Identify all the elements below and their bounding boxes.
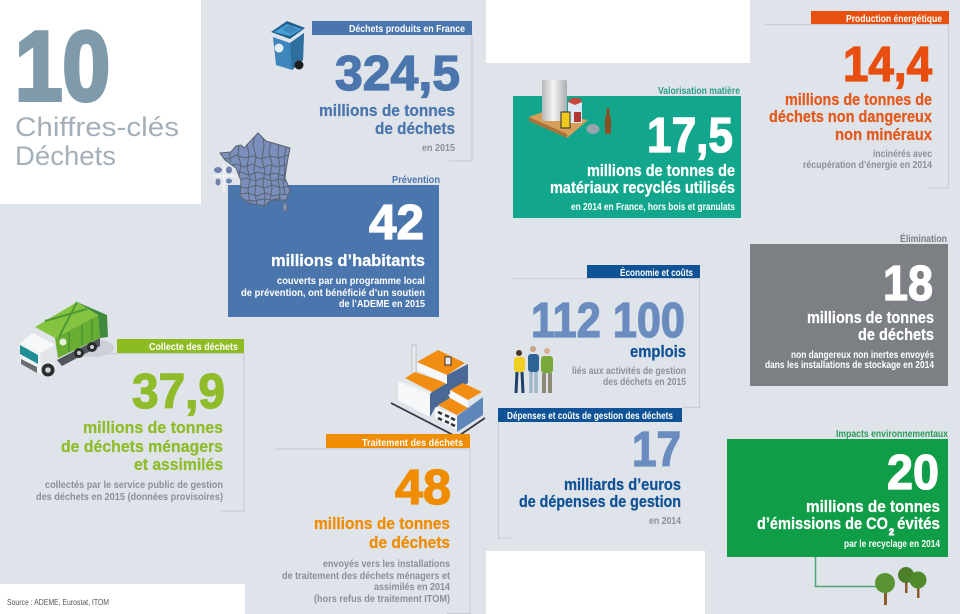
note: des déchets en 2015 xyxy=(603,377,686,388)
header bar xyxy=(498,408,682,422)
title: Chiffres-clés xyxy=(15,112,179,142)
description xyxy=(550,162,735,197)
note: en 2014 en France, hors bois et granulats xyxy=(571,202,735,213)
description: millions de tonnes xyxy=(319,102,455,120)
header bar: Collecte des déchets xyxy=(149,341,238,353)
note: couverts par un programme local xyxy=(277,276,425,287)
description: emplois xyxy=(630,343,686,361)
panel: production énergétique xyxy=(765,11,949,188)
description xyxy=(769,91,933,144)
note xyxy=(241,276,425,310)
header bar: Déchets produits en France xyxy=(349,23,465,35)
note: non dangereux non inertes envoyés xyxy=(791,350,934,361)
note: incinérés avec xyxy=(873,149,932,160)
key figure: 48 xyxy=(395,461,451,515)
icon: recycling bin xyxy=(271,21,305,70)
title: 10 xyxy=(15,11,110,121)
key figure: 324,5 xyxy=(335,47,460,101)
description: de déchets xyxy=(858,326,934,344)
description: millions d’habitants xyxy=(271,252,425,270)
header bar xyxy=(312,21,472,35)
description xyxy=(807,309,934,344)
header bar xyxy=(326,434,470,449)
title xyxy=(0,0,201,204)
note: des déchets en 2015 (données provisoires) xyxy=(36,492,223,503)
note: de l’ADEME en 2015 xyxy=(339,299,425,310)
note: collectés par le service public de gestion xyxy=(45,480,223,491)
key figure: 112 100 xyxy=(531,294,685,348)
panel: traitement des déchets xyxy=(275,345,485,614)
description: non minéraux xyxy=(835,126,933,144)
source note: Source : ADEME, Eurostat, ITOM xyxy=(7,598,109,607)
description: millions de tonnes xyxy=(314,515,450,533)
note: de prévention, ont bénéficié d’un soutien xyxy=(241,288,425,299)
description: de déchets ménagers xyxy=(61,438,223,456)
description: millions de tonnes xyxy=(83,419,223,437)
label: Élimination xyxy=(900,232,947,245)
key figure: 42 xyxy=(369,196,424,250)
blue card xyxy=(228,185,439,317)
note xyxy=(572,366,686,388)
note xyxy=(36,480,223,503)
icon: factory xyxy=(391,345,485,437)
description xyxy=(757,498,940,537)
year note: en 2014 xyxy=(649,516,681,527)
year note: en 2015 xyxy=(422,143,455,154)
description xyxy=(61,419,223,474)
description: millions de tonnes de xyxy=(785,91,932,109)
grey card xyxy=(750,244,948,386)
key figure: 14,4 xyxy=(843,38,932,92)
note xyxy=(282,559,451,605)
header bar: Économie et coûts xyxy=(620,266,693,279)
description: millions de tonnes xyxy=(806,498,940,516)
description xyxy=(319,102,455,138)
key figure: 17,5 xyxy=(647,109,733,163)
description: millions de tonnes xyxy=(807,309,934,327)
description: de déchets xyxy=(369,534,450,552)
header bar xyxy=(811,11,949,25)
icon: garbage truck xyxy=(20,302,114,376)
icon: recycled materials xyxy=(529,80,611,138)
key figure: 18 xyxy=(883,257,933,311)
key figure: 20 xyxy=(887,446,939,500)
header bar: Dépenses et coûts de gestion des déchets xyxy=(507,410,673,422)
note xyxy=(765,350,934,371)
header bar xyxy=(117,339,244,353)
note: récupération d’énergie en 2014 xyxy=(803,160,932,171)
note: (hors refus de traitement ITOM) xyxy=(314,594,450,605)
teal card xyxy=(513,96,741,218)
panel: valorisation matière xyxy=(513,80,741,218)
title: Déchets xyxy=(15,141,116,171)
header bar: Traitement des déchets xyxy=(362,437,463,449)
description: évités xyxy=(897,515,940,533)
key figure: 17 xyxy=(632,423,681,477)
note: assimilés en 2014 xyxy=(374,582,450,593)
panel: collecte des déchets xyxy=(20,302,244,511)
panel: prévention xyxy=(213,133,440,317)
note xyxy=(803,149,932,171)
panel: impacts environnementaux xyxy=(727,428,948,605)
description: 2 xyxy=(889,527,894,537)
description: milliards d’euros xyxy=(564,476,681,494)
key figure: 37,9 xyxy=(132,365,225,419)
note: de traitement des déchets ménagers et xyxy=(282,571,451,582)
panel: dépenses et coûts de gestion xyxy=(498,408,682,538)
description: millions de tonnes de xyxy=(587,162,735,180)
green card xyxy=(727,439,948,557)
panel: élimination xyxy=(750,232,948,386)
description xyxy=(519,476,681,511)
source note xyxy=(0,584,245,614)
description: de dépenses de gestion xyxy=(519,493,681,511)
label: Prévention xyxy=(392,174,440,186)
note: par le recyclage en 2014 xyxy=(844,539,940,550)
icon: map of France xyxy=(213,133,290,212)
panel: économie et coûts xyxy=(513,265,700,408)
icon: three people xyxy=(514,346,553,393)
label: Valorisation matière xyxy=(658,85,740,97)
description: déchets non dangereux xyxy=(769,108,933,126)
note: envoyés vers les installations xyxy=(323,559,450,570)
icon: trees with connector xyxy=(816,557,926,605)
description: et assimilés xyxy=(134,456,223,474)
description xyxy=(314,515,450,552)
note: liés aux activités de gestion xyxy=(572,366,686,377)
description: matériaux recyclés utilisés xyxy=(550,179,735,197)
panel: déchets produits en France xyxy=(271,21,472,161)
description: d’émissions de CO xyxy=(757,515,888,533)
description: de déchets xyxy=(375,120,455,138)
header bar xyxy=(587,265,700,279)
